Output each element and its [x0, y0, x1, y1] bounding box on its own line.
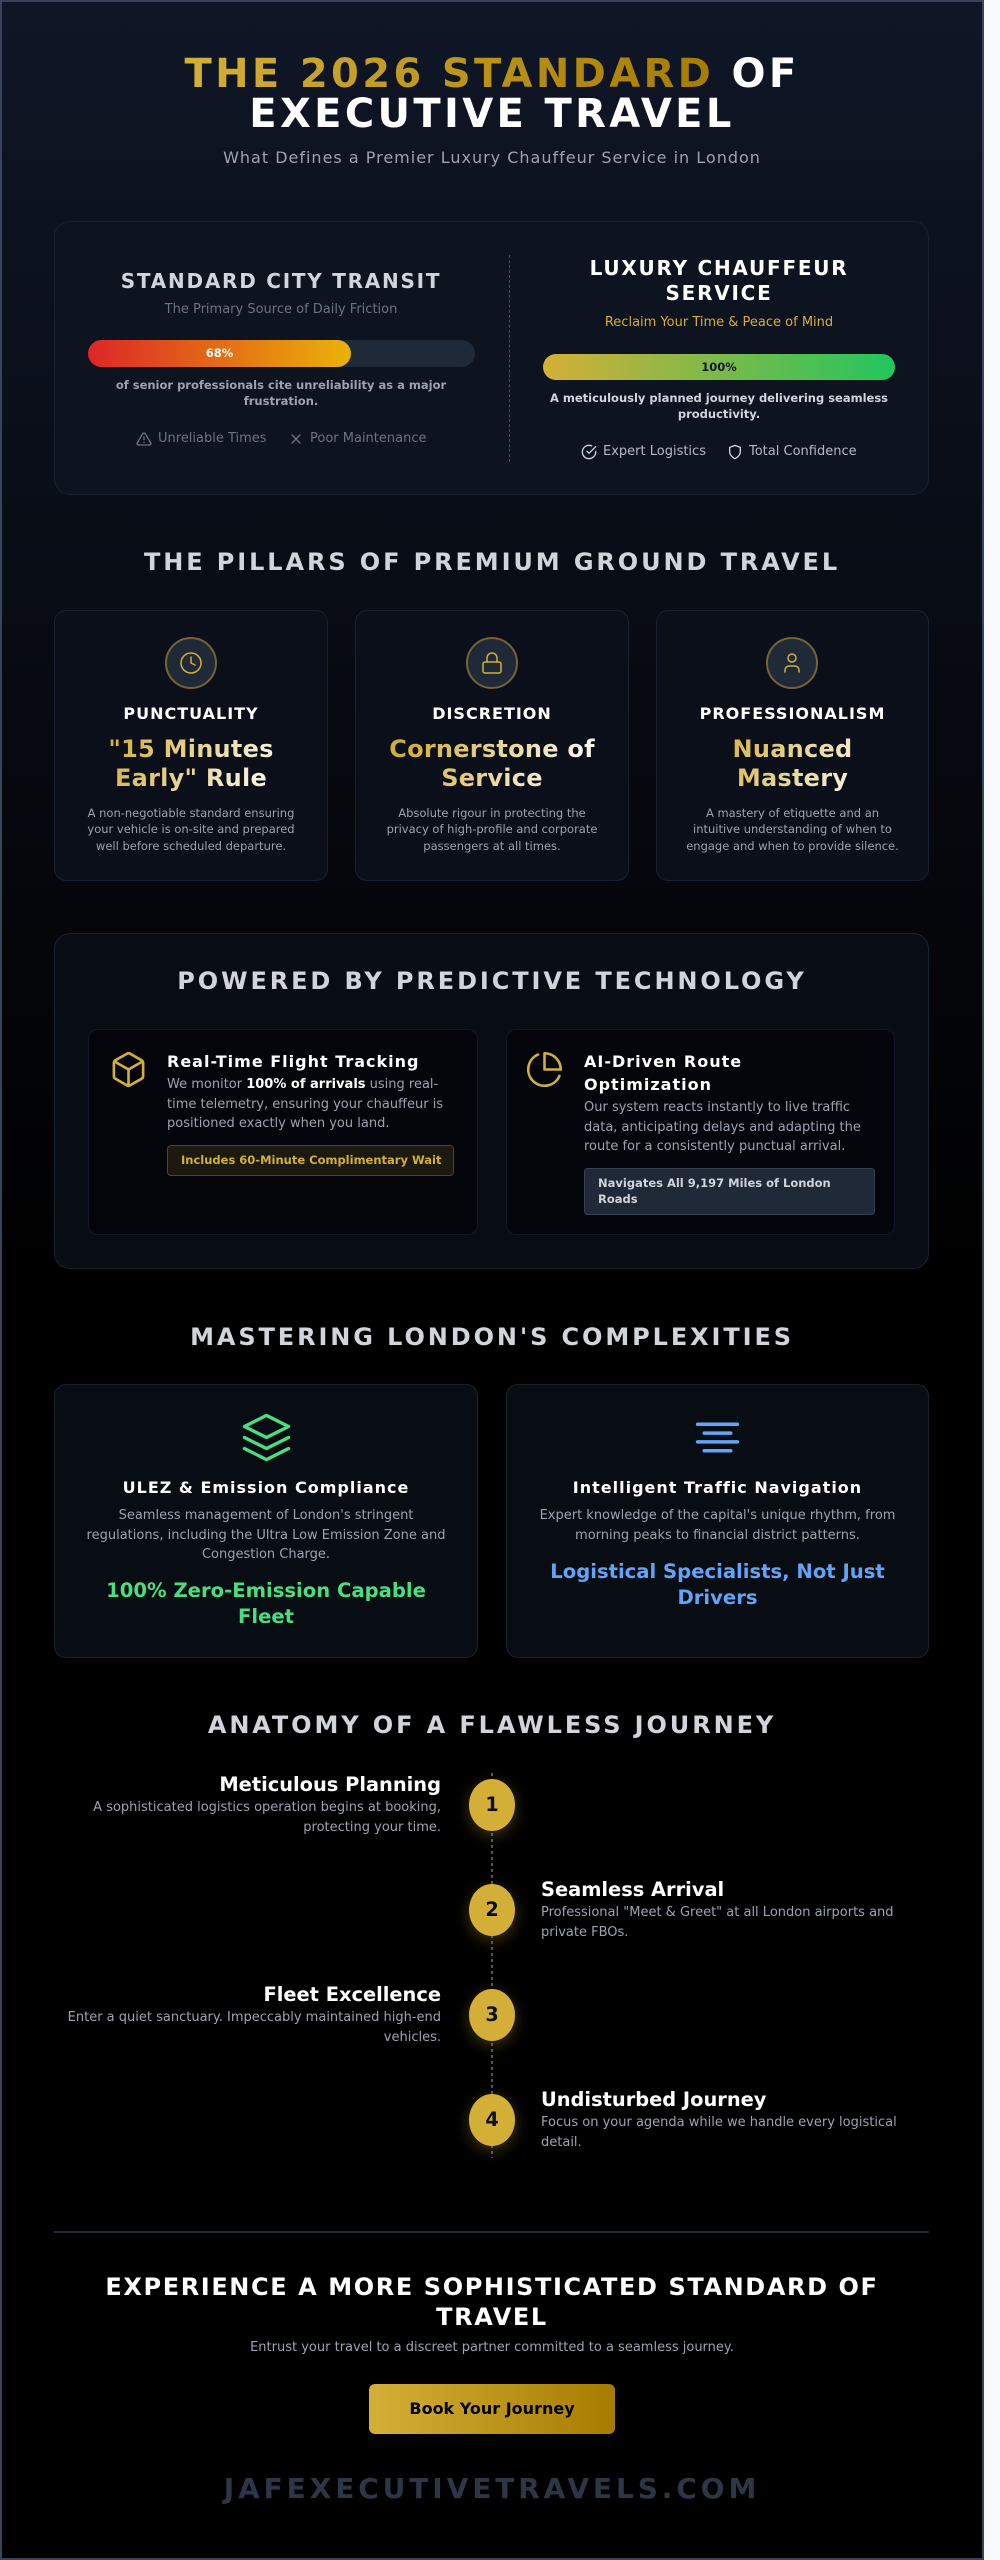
number	[469, 1779, 515, 1831]
statement: 15 minutes	[74, 735, 308, 793]
step 4	[462, 2088, 897, 2157]
icon: warning triangle	[136, 432, 152, 446]
card text: Our system reacts instantly to live traffic	[584, 1100, 850, 1115]
statement: nuanced mastery: Nuanced	[733, 735, 852, 763]
card title: Optimization	[584, 1075, 712, 1094]
icon: layers	[242, 1414, 290, 1462]
description: intuitive understanding of when to	[693, 822, 892, 836]
panel: traffic	[506, 1384, 929, 1658]
button: book your journey: Book Your Journey	[409, 2399, 575, 2418]
number	[469, 1989, 515, 2041]
button: book your journey	[369, 2384, 615, 2434]
statement: nuanced mastery: Mastery	[737, 764, 848, 792]
card text: We monitor 100% of arrivals using real-	[167, 1077, 438, 1092]
footer website: JAFEXECUTIVETRAVELS.COM	[224, 2472, 760, 2505]
step text	[93, 1800, 441, 1835]
card text: Congestion Charge.	[202, 1547, 330, 1562]
card text	[540, 1508, 895, 1543]
step text: A sophisticated logistics operation begins at booking,	[93, 1800, 441, 1815]
card title: ULEZ & Emission Compliance	[123, 1478, 409, 1497]
card text	[87, 1508, 445, 1562]
description: engage and when to provide silence.	[686, 839, 899, 853]
card title: AI-Driven Route	[584, 1052, 742, 1071]
caption: luxury: A meticulously planned journey delivering seamless	[550, 391, 888, 405]
highlight: Logistical Specialists, Not Just	[550, 1560, 885, 1583]
description	[387, 806, 597, 853]
description: privacy of high-profile and corporate	[387, 822, 597, 836]
panel: punctuality	[54, 610, 328, 881]
step text	[541, 2115, 897, 2150]
highlight	[106, 1579, 426, 1628]
highlight	[550, 1560, 885, 1609]
icon: align center	[696, 1422, 740, 1452]
call to action heading: TRAVEL	[436, 2303, 548, 2331]
heading: standard city transit: STANDARD CITY TRANSIT	[121, 269, 441, 293]
step text: Enter a quiet sanctuary. Impeccably maintained high-end	[68, 2010, 441, 2025]
step text: protecting your time.	[303, 1820, 441, 1835]
description	[87, 806, 295, 853]
step text: detail.	[541, 2135, 582, 2150]
subtitle: What Defines a Premier Luxury Chauffeur Service in London	[223, 148, 761, 167]
card text: morning peaks to financial district patterns.	[575, 1528, 860, 1543]
card title: Intelligent Traffic Navigation	[573, 1478, 862, 1497]
card title: Real-Time Flight Tracking	[167, 1052, 420, 1071]
card text: positioned exactly when you land.	[167, 1116, 389, 1131]
number: 3	[485, 2003, 499, 2026]
statement: cornerstone: Cornerstone of	[389, 735, 595, 763]
caption: standard	[116, 378, 446, 408]
highlight: Fleet	[238, 1605, 294, 1628]
icon: box	[112, 1052, 144, 1088]
tag: miles: Navigates All 9,197 Miles of London	[598, 1176, 831, 1190]
card text: route for a consistently punctual arrival.	[584, 1139, 845, 1154]
heading: complexities: MASTERING LONDON'S COMPLEXITIES	[190, 1323, 794, 1351]
description: A non-negotiable standard ensuring	[88, 806, 294, 820]
label: expert logistics: Expert Logistics	[603, 444, 706, 459]
number: 1	[485, 1793, 499, 1816]
bar fill	[88, 340, 351, 367]
panel: comparison	[54, 221, 929, 495]
statement: 15 minutes: Early" Rule	[115, 764, 267, 792]
step text: private FBOs.	[541, 1925, 628, 1940]
icon: check circle	[582, 444, 596, 460]
step title: Seamless Arrival	[541, 1878, 724, 1901]
card: route optimization	[506, 1029, 895, 1235]
card text: regulations, including the Ultra Low Emission Zone and	[87, 1528, 445, 1543]
number	[469, 2094, 515, 2146]
icon: cross	[291, 434, 301, 444]
icon: clock	[165, 637, 217, 689]
panel: ULEZ	[54, 1384, 478, 1658]
description: A mastery of etiquette and an	[706, 806, 879, 820]
icon: user	[766, 637, 818, 689]
description: your vehicle is on-site and prepared	[87, 822, 295, 836]
subheading: luxury: Reclaim Your Time & Peace of Mind	[605, 315, 833, 330]
caption: luxury	[550, 391, 888, 421]
card: flight tracking	[88, 1029, 478, 1235]
icon: shield	[729, 444, 741, 460]
tag: wait: Includes 60-Minute Complimentary Wait	[181, 1153, 441, 1167]
call to action text: Entrust your travel to a discreet partner committed to a seamless journey.	[250, 2340, 734, 2355]
label: professionalism: PROFESSIONALISM	[700, 704, 885, 723]
number: 2	[485, 1898, 499, 1921]
number: 4	[485, 2108, 499, 2131]
step text	[541, 1905, 894, 1940]
card text: Seamless management of London's stringent	[119, 1508, 413, 1523]
panel: discretion	[355, 610, 629, 881]
step text	[68, 2010, 441, 2045]
step title: Meticulous Planning	[219, 1773, 441, 1796]
label: unreliable times: Unreliable Times	[158, 431, 267, 446]
heading: pillars: THE PILLARS OF PREMIUM GROUND TRAVEL	[144, 548, 840, 576]
label: punctuality: PUNCTUALITY	[123, 704, 259, 723]
card text: Expert knowledge of the capital's unique rhythm, from	[540, 1508, 895, 1523]
title: THE 2026 STANDARD OF	[184, 51, 800, 97]
caption: standard: frustration.	[244, 394, 318, 408]
progress bar 100%: 100%	[701, 360, 737, 374]
caption: luxury: productivity.	[678, 407, 760, 421]
description: Absolute rigour in protecting the	[398, 806, 586, 820]
subheading: standard: The Primary Source of Daily Friction	[165, 302, 397, 317]
title	[184, 51, 800, 137]
description	[686, 806, 899, 853]
step title: Undisturbed Journey	[541, 2088, 766, 2111]
icon: lock	[466, 637, 518, 689]
step text: Professional "Meet & Greet" at all London airports and	[541, 1905, 894, 1920]
step text: Focus on your agenda while we handle every logistical	[541, 2115, 897, 2130]
progress bar 68%	[88, 340, 475, 367]
description: well before scheduled departure.	[96, 839, 286, 853]
bar fill: 68%	[206, 346, 233, 360]
description: passengers at all times.	[423, 839, 561, 853]
card text: data, anticipating delays and adapting the	[584, 1120, 861, 1135]
card text	[584, 1100, 861, 1154]
title: EXECUTIVE TRAVEL	[249, 91, 735, 137]
progress bar 100%	[543, 354, 895, 380]
highlight: Drivers	[677, 1586, 758, 1609]
step 3	[68, 1983, 522, 2052]
tag: wait	[167, 1145, 454, 1176]
icon: pie chart	[526, 1052, 562, 1087]
card text: time telemetry, ensuring your chauffeur is	[167, 1097, 443, 1112]
highlight: 100% Zero-Emission Capable	[106, 1579, 426, 1602]
number	[469, 1884, 515, 1936]
statement: cornerstone: Service	[441, 764, 543, 792]
label: discretion: DISCRETION	[432, 704, 552, 723]
tag: miles: Roads	[598, 1192, 638, 1206]
statement: nuanced mastery	[676, 735, 909, 793]
label: poor maintenance: Poor Maintenance	[310, 431, 426, 446]
heading: luxury chauffeur service: SERVICE	[666, 281, 772, 305]
heading: technology: POWERED BY PREDICTIVE TECHNOLOGY	[177, 967, 807, 995]
call to action heading: EXPERIENCE A MORE SOPHISTICATED STANDARD OF	[105, 2273, 879, 2301]
panel: technology	[54, 933, 929, 1269]
card text	[167, 1077, 443, 1131]
tag: miles	[584, 1168, 875, 1215]
card title	[584, 1052, 742, 1094]
panel: professionalism	[656, 610, 929, 881]
caption: standard: of senior professionals cite unreliability as a major	[116, 378, 446, 392]
call to action heading	[105, 2273, 879, 2331]
statement: cornerstone	[375, 735, 609, 793]
label: total confidence: Total Confidence	[749, 444, 857, 459]
statement: 15 minutes: "15 Minutes	[108, 735, 274, 763]
heading: luxury chauffeur service: LUXURY CHAUFFEUR	[590, 256, 848, 280]
step text: vehicles.	[384, 2030, 441, 2045]
step title: Fleet Excellence	[263, 1983, 441, 2006]
step 2	[462, 1878, 894, 1947]
step 1	[93, 1773, 522, 1842]
heading: journey: ANATOMY OF A FLAWLESS JOURNEY	[208, 1711, 776, 1739]
heading: luxury chauffeur service	[590, 256, 848, 305]
